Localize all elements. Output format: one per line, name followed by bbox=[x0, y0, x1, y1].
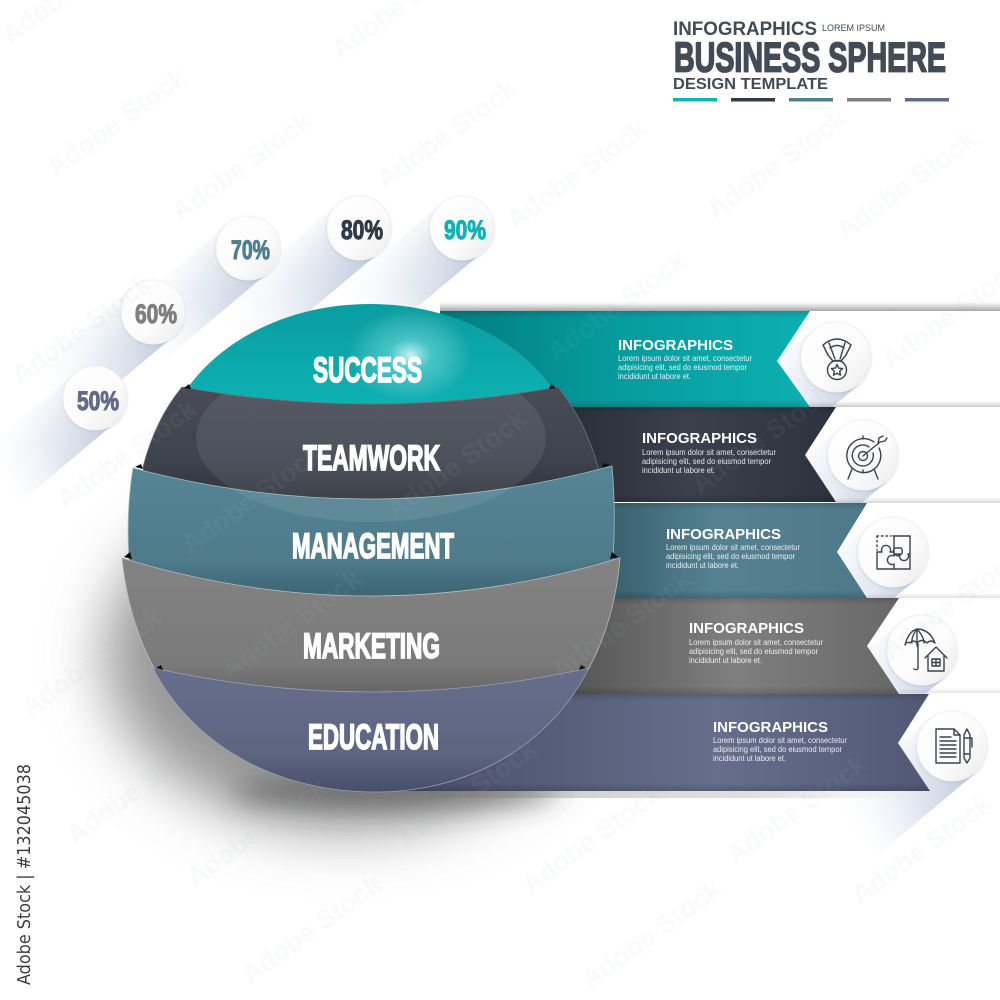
icon badge: document and pen bbox=[917, 711, 987, 781]
ribbon text: teamwork: INFOGRAPHICS bbox=[642, 430, 757, 447]
percent badge: 90% bbox=[430, 196, 494, 260]
sphere layer: education bbox=[153, 668, 589, 792]
ribbon: education bbox=[400, 694, 930, 791]
percent badge: 70% bbox=[216, 216, 280, 280]
stock watermarks: Adobe Stock bbox=[371, 73, 523, 195]
stock watermarks: Adobe Stock bbox=[391, 733, 543, 855]
title: lorem ipsum: LOREM IPSUM bbox=[822, 23, 885, 34]
glass bubble bbox=[196, 394, 546, 522]
ribbon text: management bbox=[666, 526, 800, 570]
sphere layer: teamwork bbox=[143, 387, 598, 520]
ribbon: success bbox=[440, 311, 810, 407]
ribbon text: teamwork: incididunt ut labore et. bbox=[642, 465, 715, 475]
stock watermarks: Adobe Stock bbox=[721, 748, 873, 870]
title block bbox=[673, 19, 949, 102]
ribbon text: success: adipisicing elit, sed do eiusmod tempor bbox=[618, 362, 747, 372]
stock watermarks: Adobe Stock bbox=[846, 788, 998, 910]
label: marketing: MARKETING bbox=[303, 627, 440, 666]
stock watermarks: Adobe Stock bbox=[501, 113, 653, 235]
ribbon text: education: adipisicing elit, sed do eiusmod tempor bbox=[713, 744, 842, 754]
stock watermarks: Adobe Stock bbox=[16, 601, 168, 723]
sphere layer: management bbox=[128, 466, 614, 610]
percent badge: 50%: 50% bbox=[77, 386, 119, 416]
ribbon text: marketing: Lorem ipsum dolor sit amet, consectetur bbox=[689, 637, 823, 647]
ribbon text: management: INFOGRAPHICS bbox=[666, 526, 781, 543]
stock watermarks: Adobe Stock bbox=[181, 771, 333, 893]
stock watermarks: Adobe Stock bbox=[381, 403, 533, 525]
stock watermarks: Adobe Stock bbox=[516, 778, 668, 900]
percentage long shadows bbox=[20, 210, 478, 488]
title: infographics: INFOGRAPHICS bbox=[673, 19, 817, 40]
sphere bbox=[122, 304, 620, 792]
ribbon: management bbox=[590, 503, 867, 598]
stock watermarks: Adobe Stock bbox=[576, 873, 728, 995]
icon badge: target bbox=[828, 420, 898, 490]
label: management: MANAGEMENT bbox=[292, 527, 454, 566]
ribbon text: success: Lorem ipsum dolor sit amet, consectetur bbox=[618, 353, 752, 363]
stock watermarks: Adobe Stock bbox=[41, 61, 193, 183]
icon badge: umbrella and house bbox=[887, 615, 957, 685]
percent badge: 90%: 90% bbox=[444, 215, 486, 245]
ribbon text: marketing bbox=[689, 620, 823, 665]
ribbon text: success: incididunt ut labore et. bbox=[618, 371, 691, 381]
icon long shadows bbox=[783, 334, 975, 842]
ribbon text: management: incididunt ut labore et. bbox=[666, 560, 739, 570]
ribbon text: teamwork: adipisicing elit, sed do eiusmod tempor bbox=[642, 456, 771, 466]
ribbon text: management: Lorem ipsum dolor sit amet, consectetur bbox=[666, 542, 800, 552]
ribbon text: marketing: INFOGRAPHICS bbox=[689, 620, 804, 637]
ribbon: marketing bbox=[570, 598, 899, 694]
ribbon text: management: adipisicing elit, sed do eiusmod tempor bbox=[666, 551, 795, 561]
layer corner tucks bbox=[124, 384, 618, 670]
ribbon text: education: incididunt ut labore et. bbox=[713, 753, 786, 763]
ribbon text: marketing: adipisicing elit, sed do eiusmod tempor bbox=[689, 646, 818, 656]
ribbon text: teamwork bbox=[642, 430, 776, 475]
stock watermarks: Adobe Stock bbox=[176, 438, 328, 560]
sphere ground shadow bbox=[105, 480, 585, 830]
percent badge: 70%: 70% bbox=[231, 235, 270, 265]
stock watermarks: Adobe Stock bbox=[831, 123, 983, 245]
ribbon text: success: INFOGRAPHICS bbox=[618, 337, 733, 354]
stock watermarks: Adobe Stock bbox=[546, 563, 698, 685]
stock watermarks: Adobe Stock bbox=[6, 268, 158, 390]
stock watermarks: Adobe Stock bbox=[216, 563, 368, 685]
ribbon text: marketing: incididunt ut labore et. bbox=[689, 655, 762, 665]
percent badge: 50% bbox=[63, 366, 127, 430]
stock id vertical text: Adobe Stock | #132045038 bbox=[14, 764, 35, 985]
sphere highlight bbox=[348, 309, 472, 401]
percent badge: 60%: 60% bbox=[135, 299, 177, 329]
sphere layer: marketing bbox=[122, 558, 620, 695]
stock watermarks: Adobe Stock bbox=[686, 378, 838, 500]
stock watermarks: Adobe Stock bbox=[166, 105, 318, 227]
label: success: SUCCESS bbox=[313, 351, 422, 390]
ribbon text: education bbox=[713, 719, 847, 763]
ribbon text: education: Lorem ipsum dolor sit amet, consectetur bbox=[713, 735, 847, 745]
stock watermarks: Adobe Stock bbox=[51, 393, 203, 515]
stock watermarks: Adobe Stock bbox=[236, 868, 388, 990]
title colour bars bbox=[673, 98, 949, 102]
label: education: EDUCATION bbox=[308, 718, 439, 757]
stock watermarks: Adobe Stock bbox=[61, 728, 213, 850]
row shadow lines bbox=[430, 302, 1000, 798]
ribbon text: teamwork: Lorem ipsum dolor sit amet, consectetur bbox=[642, 447, 776, 457]
stock watermarks: Adobe Stock bbox=[541, 245, 693, 367]
percent badge: 80% bbox=[327, 196, 391, 260]
stock watermarks: Adobe Stock bbox=[701, 103, 853, 225]
sphere layer: success cap bbox=[186, 304, 554, 420]
icon badge: puzzle bbox=[858, 517, 928, 587]
label: teamwork: TEAMWORK bbox=[303, 439, 440, 478]
ribbon: teamwork bbox=[540, 407, 836, 502]
title: design template: DESIGN TEMPLATE bbox=[673, 76, 828, 93]
percent badge: 80%: 80% bbox=[341, 215, 383, 245]
ribbon text: success bbox=[618, 337, 752, 381]
icon badge: medal bbox=[801, 322, 871, 392]
percent badge: 60% bbox=[121, 280, 185, 344]
ribbon text: education: INFOGRAPHICS bbox=[713, 719, 828, 736]
